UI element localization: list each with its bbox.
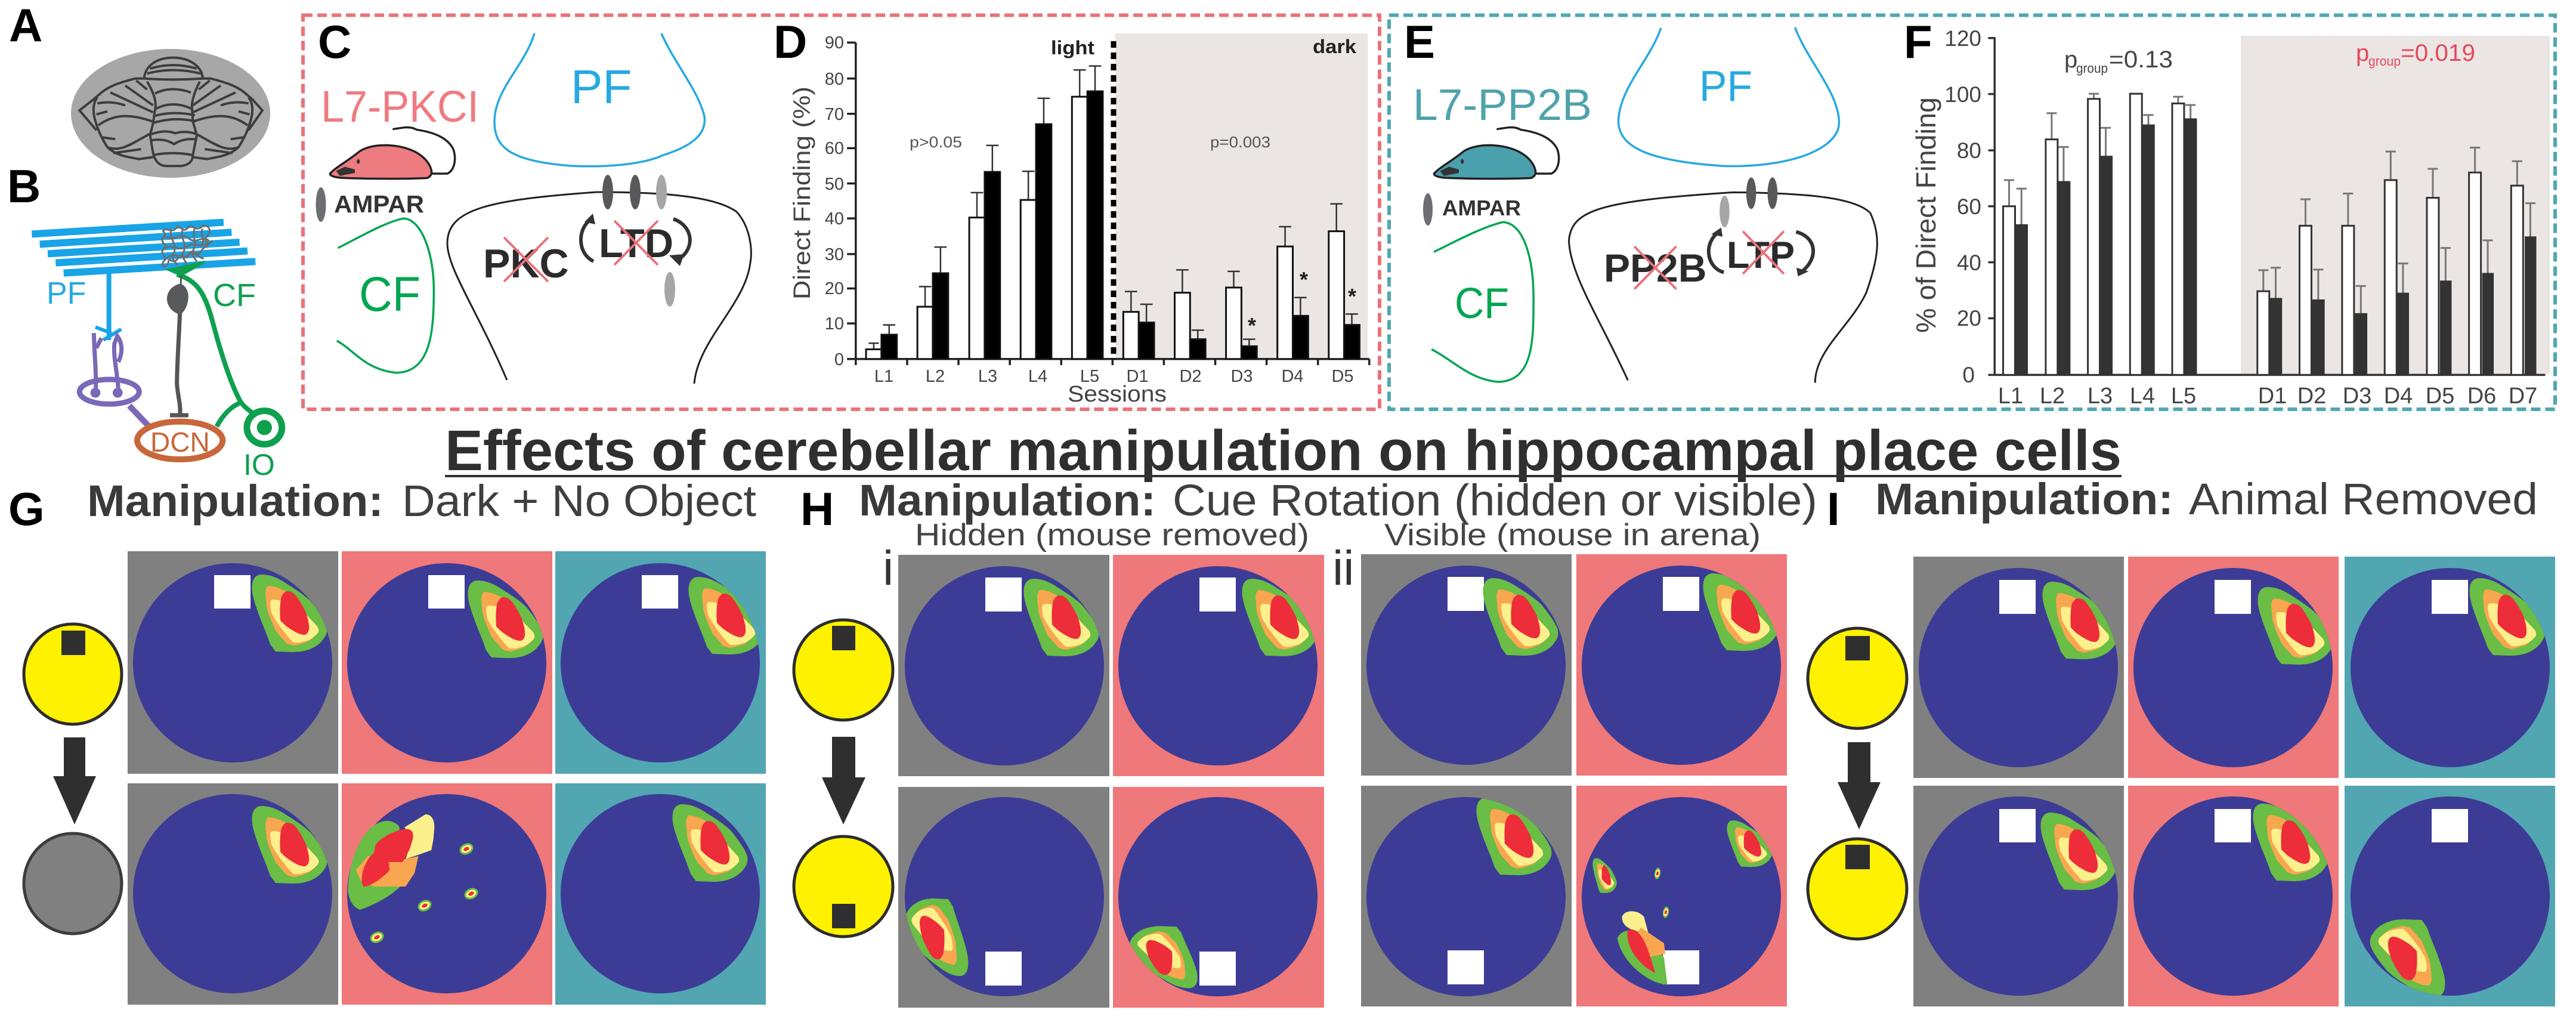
panel label I: I <box>1827 483 1840 535</box>
AMPAR legend <box>316 187 424 222</box>
panel label C: C <box>318 16 351 68</box>
panel C: synapse schematic <box>316 33 751 384</box>
heading H <box>859 475 1817 525</box>
icon: arena before <box>1808 628 1907 728</box>
subheading visible: Visible (mouse in arena) <box>1384 518 1761 552</box>
x axis labels: D2 <box>1179 367 1202 386</box>
sub-label i: i <box>883 541 893 595</box>
panel D: bar chart direct finding light vs dark <box>789 33 1369 407</box>
significance stars: * <box>1348 284 1356 308</box>
y axis labels: 0 <box>834 350 844 369</box>
x axis labels: D5 <box>1331 367 1354 386</box>
p group dark: group <box>2368 54 2401 69</box>
parallel fibre terminal: PF <box>571 60 632 113</box>
significance stars <box>1248 267 1356 338</box>
climbing fibre terminal: CF <box>1455 280 1509 328</box>
place map H-ii top control <box>1361 554 1572 776</box>
y axis labels: 40 <box>825 209 844 228</box>
parallel fibre terminal: PF <box>1699 63 1752 110</box>
x axis labels: L1 <box>874 367 893 386</box>
climbing fibre terminal <box>1431 222 1533 382</box>
dark period background <box>1115 33 1368 359</box>
place map G top PKCI <box>342 551 552 774</box>
place map I bottom PKCI <box>2128 786 2339 1006</box>
Purkinje spine outline <box>1569 192 1877 383</box>
x axis labels: L4 <box>1028 367 1047 386</box>
significance stars: * <box>1248 313 1256 338</box>
x axis labels: D5 <box>2426 384 2454 409</box>
climbing fibre terminal <box>337 218 434 373</box>
x axis labels: D3 <box>1230 367 1253 386</box>
heading I <box>1875 474 2538 524</box>
x axis labels: L1 <box>1998 384 2023 409</box>
p group light: group <box>2076 61 2108 76</box>
x axis labels: D3 <box>2343 384 2371 409</box>
place map H-i top PKCI <box>1113 555 1324 776</box>
panel A: cerebellum illustration <box>71 49 270 178</box>
panel B: cerebellar circuit diagram <box>32 223 282 481</box>
y axis labels <box>825 33 844 369</box>
p values: p>0.05 <box>910 133 962 151</box>
panel label A: A <box>9 0 42 51</box>
y axis labels: 20 <box>825 279 844 298</box>
x axis labels <box>874 367 1354 386</box>
y axis labels: 40 <box>1957 251 1981 275</box>
icon: arena after, object at bottom <box>794 836 893 937</box>
heading G: Dark + No Object <box>402 476 756 526</box>
x axis labels: L5 <box>2171 384 2196 409</box>
y axis labels: 80 <box>825 70 844 89</box>
panel label B: B <box>7 160 41 212</box>
PKC crossed out: PKC <box>483 241 569 286</box>
y axis labels: 60 <box>825 139 844 158</box>
IO cell <box>247 411 282 444</box>
p group dark: p <box>2356 40 2369 66</box>
parallel fibres <box>32 223 255 340</box>
arrow <box>1838 742 1881 829</box>
AMPA receptors <box>1720 177 1777 227</box>
p group light: p <box>2064 47 2077 73</box>
heading H: Manipulation: <box>859 475 1156 525</box>
label PF: PF <box>47 276 86 311</box>
Purkinje dendrites <box>162 226 213 267</box>
y axis labels: 0 <box>1962 363 1975 387</box>
x axis labels: L3 <box>2088 384 2113 409</box>
x axis labels: D7 <box>2509 384 2537 409</box>
bars <box>866 66 1359 359</box>
LTD crossed out with arrows: LTD <box>599 221 673 266</box>
y axis labels: 50 <box>825 175 844 194</box>
panel F: bar chart direct finding light vs dark <box>1910 26 2550 409</box>
y axis labels: 90 <box>825 33 844 53</box>
LTP crossed out with arrows <box>1709 227 1813 276</box>
y axis labels: 80 <box>1957 138 1981 163</box>
AMPA receptors <box>602 175 675 307</box>
x axis labels: D4 <box>1281 367 1304 386</box>
dark period background <box>2241 36 2550 374</box>
axes <box>847 42 1369 365</box>
place map H-ii bottom PKCI, fragmented field <box>1576 786 1787 1006</box>
dark label: dark <box>1313 36 1356 57</box>
x axis labels: D2 <box>2297 384 2326 409</box>
panel E/F: L7-PP2B dashed box <box>1389 16 2555 409</box>
panel E: synapse schematic <box>1413 27 1877 383</box>
main title: Effects of cerebellar manipulation on hippocampal place cells <box>445 419 2122 483</box>
x axis labels: L3 <box>978 367 997 386</box>
y axis labels <box>1944 26 1981 387</box>
x axis labels: D4 <box>2384 384 2413 409</box>
Purkinje soma and axon <box>170 313 188 416</box>
icon: arena before, yellow with object <box>24 624 122 724</box>
PP2B crossed out: PP2B <box>1604 246 1706 290</box>
heading L7-PKCI: L7-PKCI <box>321 82 479 131</box>
label CF: CF <box>213 277 256 313</box>
significance stars: * <box>1300 267 1308 292</box>
p group dark: =0.019 <box>2401 40 2475 66</box>
light/dark separator <box>1111 41 1117 359</box>
x axis title: Sessions <box>1068 382 1167 407</box>
place map G bottom PKCI, remapped and fragmented field <box>342 783 552 1005</box>
interneuron <box>79 333 149 427</box>
place map I bottom PP2B, rotated field <box>2345 786 2555 1006</box>
axes <box>1989 37 2545 375</box>
place map H-ii top PKCI <box>1576 554 1787 776</box>
place map H-i bottom control <box>898 787 1109 1008</box>
icon: arena after <box>1808 839 1907 939</box>
panel label E: E <box>1404 16 1435 68</box>
x axis labels: D1 <box>2258 384 2287 409</box>
heading L7-PP2B: L7-PP2B <box>1413 80 1592 129</box>
arrow <box>822 737 865 824</box>
place map G top PP2B <box>555 551 766 774</box>
p values <box>910 133 1270 151</box>
icon: red mouse <box>330 127 455 179</box>
y axis labels: 100 <box>1944 82 1981 107</box>
AMPAR legend: AMPAR <box>1442 196 1521 220</box>
panel label G: G <box>8 483 45 535</box>
x axis labels: L2 <box>2040 384 2065 409</box>
parallel fibre terminal <box>494 33 704 166</box>
place map H-ii bottom control <box>1361 786 1572 1006</box>
y axis labels: 120 <box>1944 26 1981 51</box>
place map I top PKCI <box>2128 557 2339 778</box>
place map H-i top control <box>898 555 1109 776</box>
y axis labels: 10 <box>825 314 844 333</box>
place map I top PP2B <box>2345 557 2555 778</box>
x axis labels: D1 <box>1126 367 1149 386</box>
sub-label ii: ii <box>1332 541 1354 595</box>
heading G: Manipulation: <box>87 476 384 526</box>
p group dark <box>2356 40 2475 69</box>
LTD crossed out with arrows <box>581 214 690 266</box>
place map H-i bottom PKCI <box>1113 787 1324 1008</box>
y axis title: % of Direct Finding <box>1910 97 1941 333</box>
x axis labels: D6 <box>2467 384 2496 409</box>
y axis labels: 60 <box>1957 194 1981 219</box>
AMPAR legend <box>1423 193 1521 226</box>
y axis labels: 30 <box>825 245 844 264</box>
y axis labels: 20 <box>1957 306 1981 331</box>
icon: arena before, object at top <box>794 620 893 720</box>
x axis labels: L2 <box>926 367 945 386</box>
AMPAR legend: AMPAR <box>334 190 424 218</box>
climbing fibre <box>165 261 206 276</box>
light label: light <box>1051 37 1094 58</box>
y axis title: Direct Finding (%) <box>789 87 815 299</box>
p values: p=0.003 <box>1210 133 1270 151</box>
p group light: =0.13 <box>2109 47 2173 73</box>
panel label D: D <box>774 16 807 68</box>
subheading hidden: Hidden (mouse removed) <box>915 518 1309 552</box>
place map G bottom control <box>128 783 338 1005</box>
p group light <box>2064 47 2173 76</box>
panel C: L7-PKCI dashed box <box>303 16 1380 409</box>
DCN oval <box>137 422 222 459</box>
parallel fibre terminal <box>1618 27 1839 166</box>
heading H: Cue Rotation (hidden or visible) <box>1173 475 1817 525</box>
LTP crossed out with arrows: LTP <box>1727 234 1795 276</box>
Purkinje spine outline <box>447 192 751 384</box>
heading G <box>87 476 756 526</box>
icon: arena after, dark no object <box>24 833 122 934</box>
panel label H: H <box>800 483 834 535</box>
heading I: Manipulation: <box>1875 474 2173 524</box>
place map G bottom PP2B <box>555 783 766 1005</box>
icon: teal mouse <box>1434 127 1559 179</box>
label IO: IO <box>243 448 275 481</box>
bars <box>2003 94 2535 375</box>
label DCN: DCN <box>150 427 210 458</box>
x axis labels: L4 <box>2130 384 2155 409</box>
place map G top control <box>128 551 338 774</box>
place map I top control <box>1913 557 2124 778</box>
climbing fibre terminal: CF <box>359 267 420 322</box>
panel label F: F <box>1904 16 1932 68</box>
place map I bottom control <box>1913 786 2124 1006</box>
x axis labels <box>1998 384 2537 409</box>
x axis labels: L5 <box>1080 367 1099 386</box>
heading I: Animal Removed <box>2189 474 2538 524</box>
y axis labels: 70 <box>825 105 844 124</box>
arrow <box>53 737 96 824</box>
